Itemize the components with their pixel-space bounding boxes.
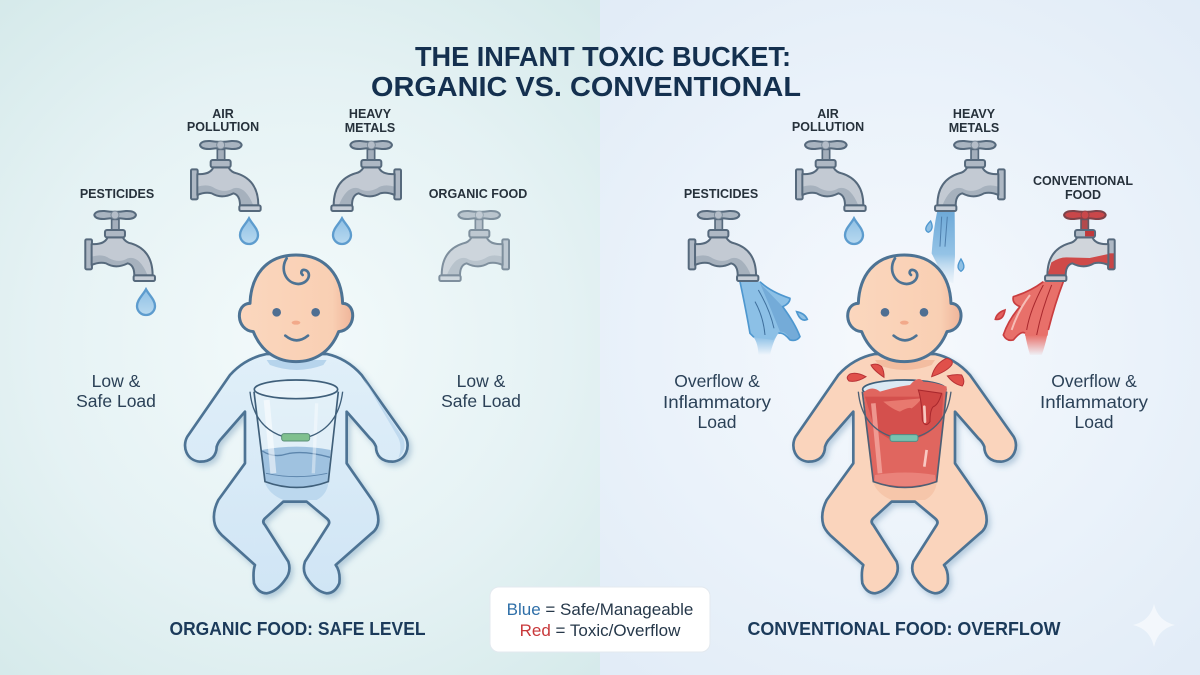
baby body in blue suit (185, 354, 408, 593)
heading: organic food safe level: ORGANIC FOOD: SAFE LEVEL (170, 619, 426, 639)
text: overflow and inflammatory load left: Overflow & (674, 371, 760, 391)
panel: conventional background (600, 0, 1200, 675)
tap: organic food, faded (429, 187, 527, 281)
text: overflow and inflammatory load left: Inflammatory (663, 392, 771, 412)
legend: Blue = Safe/Manageable (507, 600, 693, 619)
text: low and safe load right: Safe Load (441, 391, 521, 411)
red stream (995, 282, 1063, 355)
tap: air pollution, organic side: POLLUTION (187, 120, 259, 134)
tap: pesticides, organic side (80, 187, 155, 315)
text: overflow and inflammatory load right: Inflammatory (1040, 392, 1148, 412)
tap: heavy metals, conventional side, stream: METALS (949, 121, 999, 135)
title: ORGANIC VS. CONVENTIONAL (371, 71, 801, 102)
tap: air pollution, conventional side: POLLUTION (792, 120, 864, 134)
tap: conventional food, red overflow (995, 174, 1133, 355)
text: overflow and inflammatory load left: Load (698, 412, 736, 432)
text: low and safe load right (441, 371, 521, 411)
tap: heavy metals, organic side (331, 107, 401, 244)
text: overflow and inflammatory load left (663, 371, 771, 432)
tap: pesticides, organic side: PESTICIDES (80, 187, 154, 201)
tap: air pollution, conventional side (792, 107, 866, 244)
bucket overflowing with red liquid (858, 379, 951, 487)
tap: air pollution, conventional side: AIR (817, 107, 839, 121)
heading: conventional food overflow: CONVENTIONAL FOOD: OVERFLOW (748, 619, 1060, 639)
tap: organic food, faded: ORGANIC FOOD (429, 187, 527, 201)
blue stream (926, 211, 964, 283)
tap: heavy metals, conventional side, stream (926, 107, 1005, 283)
tap: conventional food, red overflow: CONVENTIONAL (1033, 174, 1133, 188)
legend (490, 587, 710, 652)
blue stream (740, 282, 807, 355)
tap: conventional food, red overflow: FOOD (1065, 188, 1101, 202)
title: THE INFANT TOXIC BUCKET: (415, 41, 791, 72)
red splashes (847, 358, 964, 386)
bucket with low water level (250, 380, 343, 487)
baby: organic side (185, 255, 408, 593)
legend: Red = Toxic/Overflow (520, 621, 681, 640)
icon: sparkle (1133, 604, 1175, 647)
tap: air pollution, organic side (187, 107, 261, 244)
title (371, 41, 801, 102)
baby body bare skin (793, 354, 1016, 593)
faucet partly filled with red (1045, 211, 1115, 281)
baby head (848, 255, 961, 362)
text: low and safe load left: Low & (92, 371, 141, 391)
tap: heavy metals, organic side: METALS (345, 121, 395, 135)
text: low and safe load right: Low & (457, 371, 506, 391)
text: overflow and inflammatory load right: Load (1075, 412, 1113, 432)
panel: organic background (0, 0, 600, 675)
tap: heavy metals, organic side: HEAVY (349, 107, 392, 121)
text: low and safe load left (76, 371, 156, 411)
tap: pesticides, conventional side, blue overflow: PESTICIDES (684, 187, 758, 201)
text: overflow and inflammatory load right: Overflow & (1051, 371, 1137, 391)
text: low and safe load left: Safe Load (76, 391, 156, 411)
baby head (239, 255, 353, 362)
tap: pesticides, conventional side, blue overflow (684, 187, 807, 355)
tap: heavy metals, conventional side, stream: HEAVY (953, 107, 996, 121)
tap: air pollution, organic side: AIR (212, 107, 234, 121)
baby: conventional side (793, 255, 1016, 593)
text: overflow and inflammatory load right (1040, 371, 1148, 432)
